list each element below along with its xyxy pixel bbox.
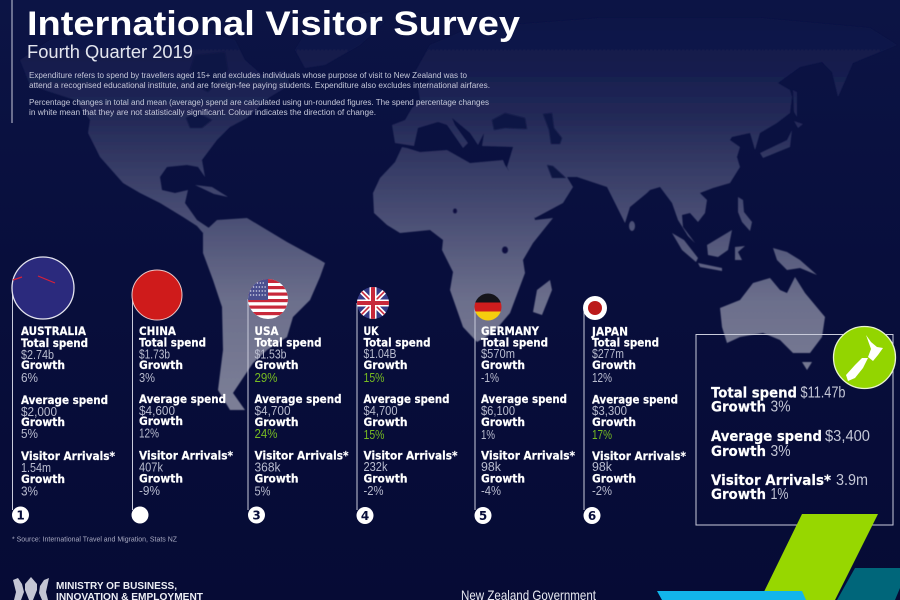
stat: average spend: Average spend <box>711 429 822 445</box>
flag: Germany <box>474 293 502 322</box>
Hudson Bay <box>190 52 228 92</box>
column: China <box>132 270 233 524</box>
stats: Japan <box>591 324 686 498</box>
stat: average spend: Growth <box>711 444 766 460</box>
world map <box>20 12 897 410</box>
stats: Japan: Growth <box>592 358 636 372</box>
footnote: * Source: International Travel and Migration, Stats NZ <box>12 536 178 544</box>
stats: China: Growth <box>139 358 183 372</box>
Lake Chad <box>453 208 457 214</box>
Black Sea <box>492 113 527 130</box>
stats: Japan: Growth <box>592 415 636 429</box>
stats: China: 3% <box>139 371 155 385</box>
stats: USA: Growth <box>254 415 298 429</box>
stats: UK: 232k <box>364 460 388 474</box>
intro text: Percentage changes in total and mean (average) spend are calculated using un-rounded figures. The spend percentage changes <box>29 97 489 107</box>
stats: Germany: -1% <box>481 371 499 385</box>
rank badge 5 <box>474 507 492 524</box>
stats: Germany: Growth <box>481 415 525 429</box>
New Guinea <box>773 248 817 275</box>
stats: Australia: $2.74b <box>21 348 54 362</box>
stats: UK: 15% <box>364 428 384 442</box>
decorative blue shape <box>657 591 806 600</box>
rank badge 2 <box>132 506 148 524</box>
rank badge 3 <box>248 506 265 524</box>
stat: total spend <box>711 384 846 416</box>
Lake Victoria <box>502 246 508 254</box>
stat: total spend: 3% <box>770 398 791 416</box>
stats: China: -9% <box>139 484 160 498</box>
stats: UK: Growth <box>364 358 408 372</box>
stats: Japan: -2% <box>592 484 612 498</box>
Greenland <box>295 12 385 68</box>
stats: Australia: Growth <box>21 472 65 486</box>
stats: Germany: Growth <box>481 472 525 486</box>
stats: Australia: Growth <box>21 358 65 372</box>
stats: Germany: GERMANY <box>481 324 540 338</box>
flag: Australia <box>12 257 74 319</box>
rank badge 4: 4 <box>361 509 369 523</box>
stats: USA: 24% <box>254 427 278 441</box>
stats: UK: -2% <box>364 484 384 498</box>
title: International Visitor Survey <box>27 5 520 43</box>
stats: USA: 368k <box>254 460 281 474</box>
Sri Lanka <box>629 221 635 231</box>
stats: Japan: 12% <box>592 371 612 385</box>
stats: China: 12% <box>139 426 159 440</box>
decorative green shape <box>760 514 878 600</box>
stats: China: CHINA <box>139 324 176 338</box>
stats: China: Average spend <box>139 392 226 406</box>
icon: coat of arms <box>13 577 49 600</box>
stat: visitor arrivals: 3.9m <box>836 472 868 489</box>
stats: Germany: Growth <box>481 358 525 372</box>
stats: Germany: 1% <box>481 428 495 442</box>
flag: USA <box>248 279 288 319</box>
Eurasia <box>392 18 897 243</box>
inland seas <box>186 52 566 254</box>
stat: visitor arrivals: Visitor Arrivals* <box>711 473 831 489</box>
stats: Australia: 3% <box>21 484 38 498</box>
Sumatra <box>672 233 698 262</box>
stats: China: Growth <box>139 414 183 428</box>
stats: China: Growth <box>139 472 183 486</box>
stats: UK: $1.04B <box>364 347 396 361</box>
stat: total spend: Total spend <box>711 386 797 402</box>
rank badge 6: 6 <box>588 509 596 523</box>
stat: average spend: 3% <box>770 443 791 460</box>
icon: New Zealand map badge <box>834 326 896 388</box>
header divider <box>12 0 13 123</box>
stats: Australia: Average spend <box>21 393 108 407</box>
flag: Japan <box>583 296 607 320</box>
Borneo <box>707 230 732 257</box>
rank badge 1 <box>12 506 29 524</box>
Great Lakes <box>186 112 212 128</box>
rank badge 4 <box>356 507 374 524</box>
column: UK <box>356 287 458 524</box>
stats: UK: 15% <box>364 371 384 385</box>
Cuba <box>195 185 228 197</box>
stats: Australia: 5% <box>21 427 38 441</box>
Sulawesi <box>735 246 745 260</box>
stats: Japan: Visitor Arrivals* <box>592 449 686 463</box>
stats: Germany <box>481 324 575 498</box>
ministry name: MINISTRY OF BUSINESS, <box>56 580 177 592</box>
stats: USA: USA <box>254 324 279 338</box>
stats: China: $1.73b <box>139 348 170 362</box>
stats: UK: $4,700 <box>364 404 398 418</box>
stats: Germany: $6,100 <box>481 404 515 418</box>
stats: UK: UK <box>364 324 379 338</box>
column: USA <box>248 279 348 524</box>
stats: UK: Growth <box>364 472 408 486</box>
stats: Australia: 1.54m <box>21 461 51 475</box>
stat: total spend: $11.47b <box>800 384 846 402</box>
rank badge 6 <box>584 507 600 524</box>
stats: UK <box>364 324 458 498</box>
stats: USA: Growth <box>254 472 298 486</box>
column: Germany <box>474 293 575 524</box>
Sakhalin <box>793 90 797 117</box>
intro text: in white mean that they are not statistically significant. Colour indicates the direction of change. <box>29 107 376 117</box>
rank badge 3: 3 <box>252 508 261 522</box>
Tasmania <box>802 362 812 370</box>
stats: UK: Average spend <box>364 392 450 406</box>
stats: Japan: 98k <box>592 460 613 474</box>
stats: Australia: $2,000 <box>21 405 57 419</box>
stats: Germany: $570m <box>481 347 515 361</box>
stats: UK: Growth <box>364 415 408 429</box>
stats: Australia: Visitor Arrivals* <box>21 449 115 463</box>
stats: Japan: 17% <box>592 428 612 442</box>
Madagascar <box>533 280 552 315</box>
stats: USA: 5% <box>254 484 270 498</box>
Africa <box>373 147 553 342</box>
stats: USA: $1.53b <box>254 348 287 362</box>
Caspian Sea <box>543 113 562 144</box>
stats: USA: Total spend <box>254 336 322 350</box>
Persian Gulf <box>547 165 566 178</box>
intro text: attend a recognised educational institute, and are foreign-fee paying students. Expenditure also excludes international airfares. <box>29 80 490 90</box>
ministry name <box>56 580 204 600</box>
Australia <box>720 277 825 353</box>
stats: UK: Visitor Arrivals* <box>364 448 458 462</box>
subtitle: Fourth Quarter 2019 <box>27 41 193 62</box>
stats: Australia <box>21 324 115 498</box>
stats: China: $4,600 <box>139 404 175 418</box>
stats: Australia: AUSTRALIA <box>21 324 86 338</box>
stats: Australia: 6% <box>21 371 38 385</box>
North America <box>20 25 290 233</box>
stats: China: 407k <box>139 460 164 474</box>
Java <box>698 263 722 271</box>
stat: visitor arrivals <box>711 472 868 503</box>
intro text <box>29 70 490 117</box>
stat: total spend: Growth <box>711 400 766 416</box>
stats: USA: $4,700 <box>254 404 291 418</box>
stat: visitor arrivals: 1% <box>770 486 789 503</box>
stats: USA: 29% <box>254 371 278 385</box>
stats: China <box>139 324 233 498</box>
stats: Japan: Total spend <box>592 336 659 350</box>
stat: visitor arrivals: Growth <box>711 487 766 503</box>
column: Australia <box>12 257 115 524</box>
stat: average spend <box>711 428 870 460</box>
Japan <box>760 130 792 158</box>
stats: Germany: -4% <box>481 484 501 498</box>
Hokkaido <box>794 121 803 128</box>
stat: average spend: $3,400 <box>825 428 870 445</box>
stats: China: Total spend <box>139 336 206 350</box>
stats: Japan: JAPAN <box>591 324 628 338</box>
stats: USA: Average spend <box>254 392 342 406</box>
panel: New Zealand totals <box>696 334 893 525</box>
stats: Australia: Total spend <box>21 336 88 350</box>
stats: Japan: Average spend <box>592 392 678 406</box>
stats: Australia: Growth <box>21 415 65 429</box>
stats: China: Visitor Arrivals* <box>139 448 233 462</box>
intro text: Expenditure refers to spend by travellers aged 15+ and excludes individuals whose purpose of visit to New Zealand was to <box>29 70 467 80</box>
column: Japan <box>583 296 686 524</box>
rank badge 1: 1 <box>16 508 25 522</box>
decorative teal shape <box>837 568 900 600</box>
stats: Japan: $277m <box>592 347 624 361</box>
stats: UK: Total spend <box>364 336 430 350</box>
stats: Germany: Average spend <box>481 392 567 406</box>
stats: Germany: Total spend <box>481 336 548 350</box>
flag: UK <box>357 287 389 319</box>
stats: USA <box>254 324 348 498</box>
stats: Japan: $3,300 <box>592 404 627 418</box>
flag: China <box>132 270 182 320</box>
stats: Japan: Growth <box>592 472 636 486</box>
South America <box>203 218 325 410</box>
stats: USA: Visitor Arrivals* <box>254 448 348 462</box>
rank badge 5: 5 <box>479 509 487 523</box>
Philippines <box>738 197 752 231</box>
stats: Germany: Visitor Arrivals* <box>481 448 575 462</box>
stats: USA: Growth <box>254 358 298 372</box>
stats: Germany: 98k <box>481 460 502 474</box>
